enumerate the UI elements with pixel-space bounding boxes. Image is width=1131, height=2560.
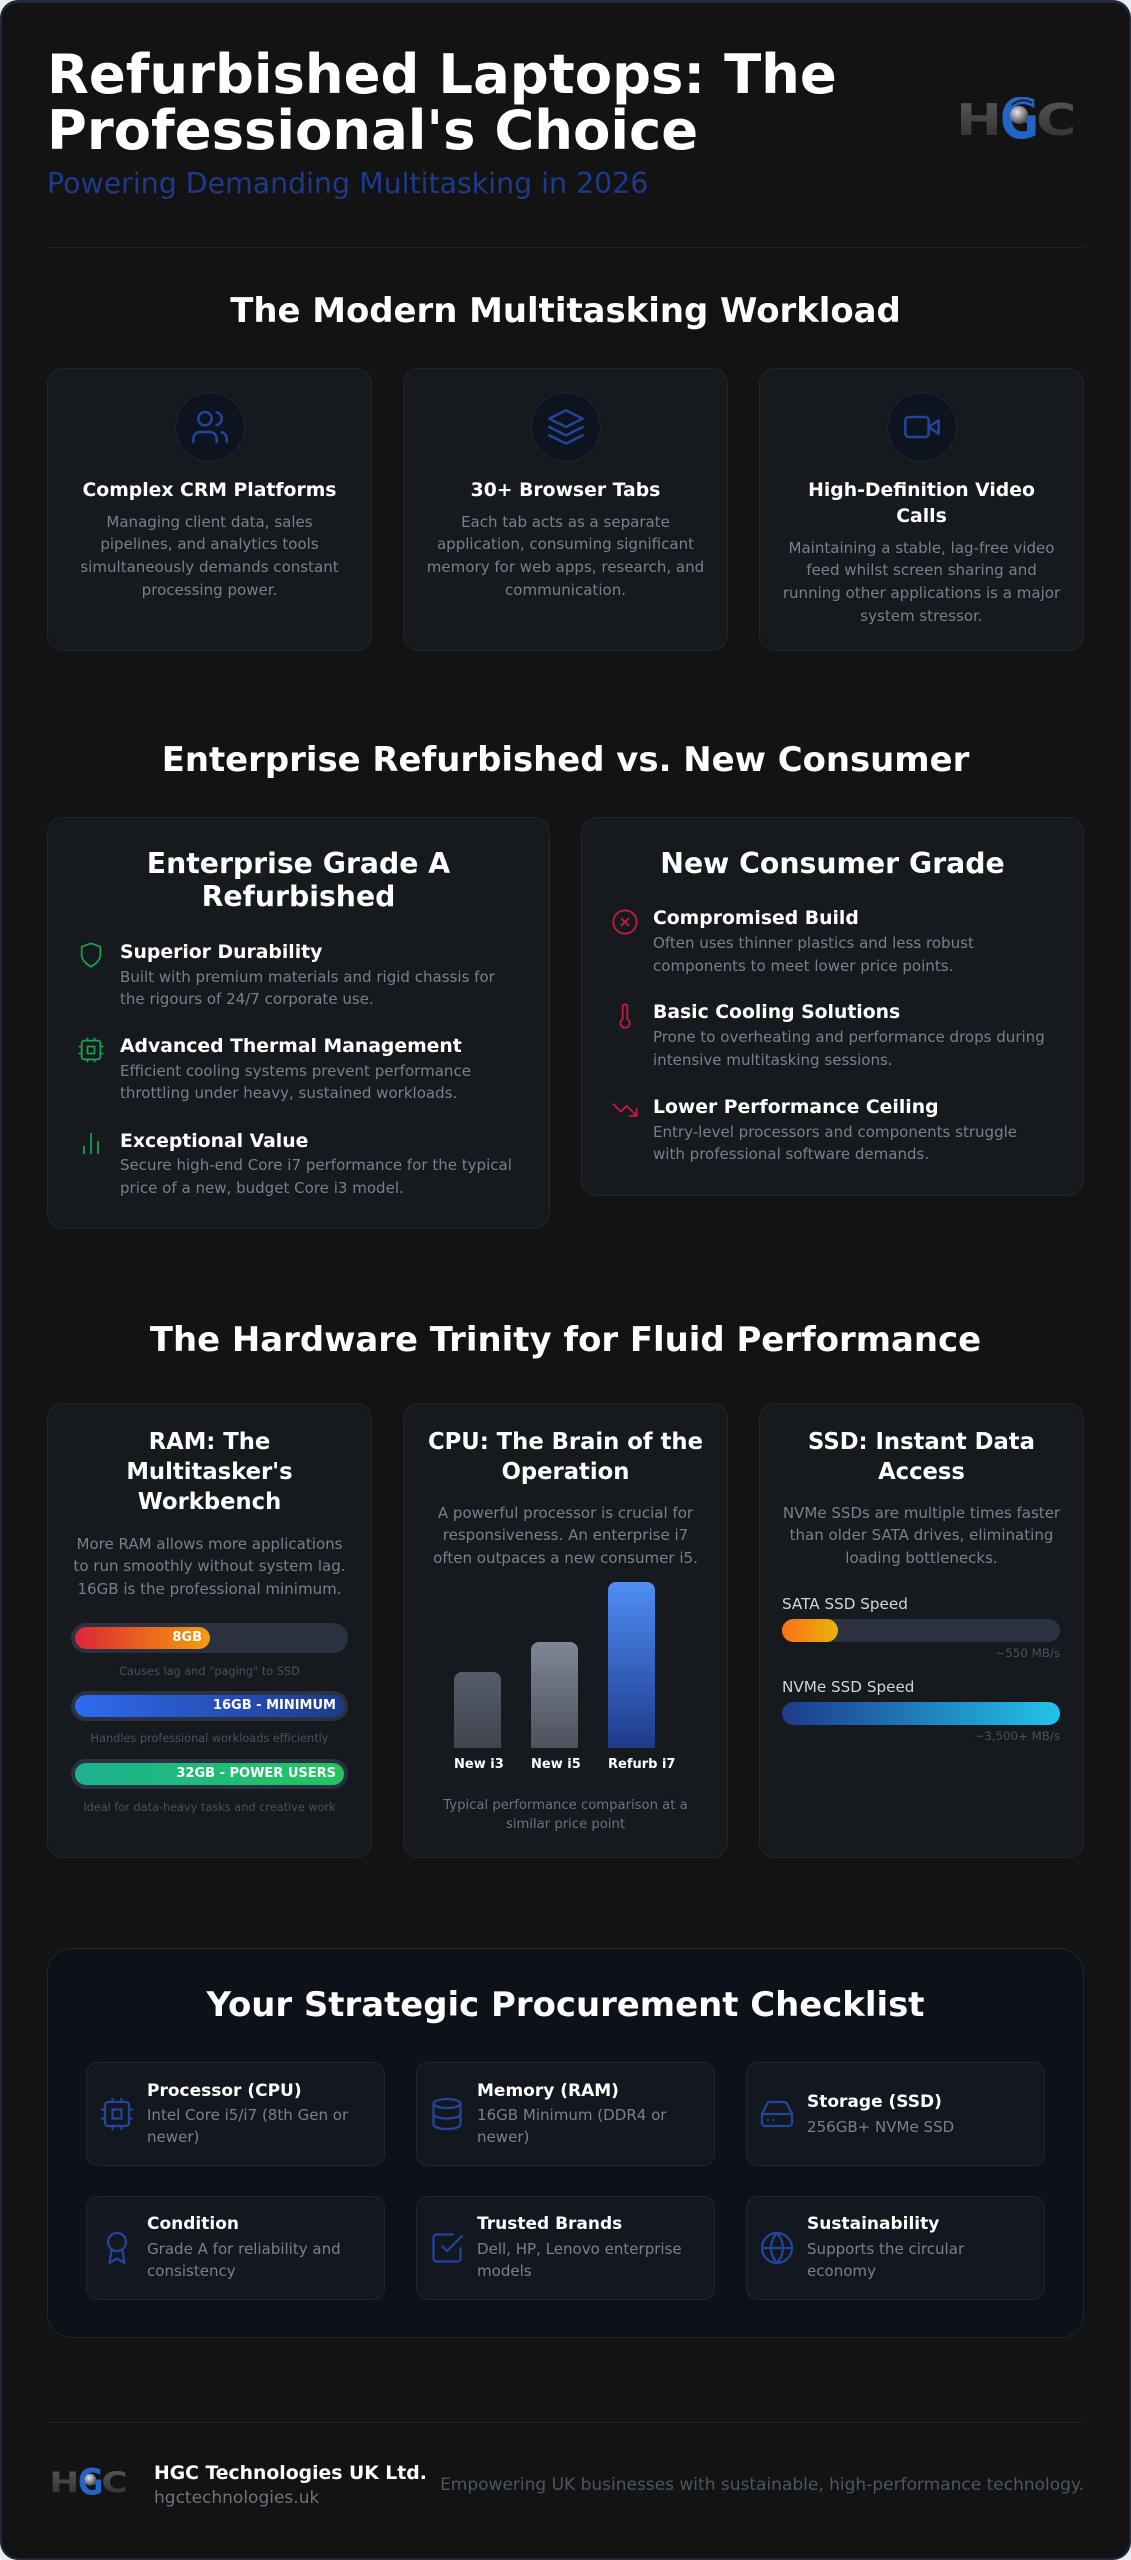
card text: Maintaining a stable, lag-free video (788, 538, 1054, 556)
panel: CRM platforms (47, 368, 372, 651)
item: condition (86, 2196, 385, 2300)
card text: feed whilst screen sharing and (806, 561, 1037, 579)
bar: New i3 (454, 1672, 501, 1748)
panel text: More RAM allows more applications (76, 1534, 343, 1552)
bar: 8GB (71, 1623, 348, 1653)
label: New i3 (454, 1756, 504, 1772)
item text: Grade A for reliability and (147, 2240, 341, 2258)
item title: Trusted Brands (477, 2214, 622, 2234)
item title: Superior Durability (120, 942, 322, 963)
item text: consistency (147, 2262, 236, 2280)
card title: High-Definition Video (808, 480, 1035, 501)
item text: Secure high-end Core i7 performance for the typical (120, 1156, 512, 1174)
item text: Prone to overheating and performance drops during (653, 1028, 1045, 1046)
footer tagline: Empowering UK businesses with sustainable, high-performance technology. (440, 2475, 1084, 2495)
item text: newer) (477, 2128, 529, 2146)
panel heading: Access (878, 1459, 965, 1485)
panel: SSD (759, 1403, 1084, 1858)
item text (477, 2240, 682, 2280)
card title (808, 480, 1035, 527)
bar: NVMe (782, 1702, 1060, 1725)
bar: 16GB: 16GB - MINIMUM (213, 1698, 336, 1713)
item text: intensive multitasking sessions. (653, 1051, 893, 1069)
panel heading: New Consumer Grade (660, 846, 1005, 880)
item text (147, 2106, 348, 2146)
item text (120, 1156, 512, 1197)
panel text: 16GB is the professional minimum. (77, 1580, 342, 1598)
caption: Causes lag and "paging" to SSD (119, 1665, 300, 1678)
title (47, 43, 837, 162)
icon: award (106, 2232, 128, 2264)
item title: Sustainability (807, 2214, 939, 2234)
bar chart (454, 1582, 675, 1772)
heading: workload: The Modern Multitasking Workload (230, 291, 901, 330)
panel: enterprise refurbished (47, 817, 550, 1229)
icon: cpu (100, 2098, 134, 2130)
caption: Ideal for data-heavy tasks and creative work (83, 1801, 336, 1814)
panel heading: Enterprise Grade A (147, 846, 450, 880)
caption: Typical performance comparison at a (443, 1798, 688, 1813)
icon: check square (432, 2233, 464, 2263)
item text: Built with premium materials and rigid chassis for (120, 968, 495, 986)
panel heading (147, 846, 450, 913)
item text: the rigours of 24/7 corporate use. (120, 990, 374, 1008)
item text (653, 1123, 1017, 1163)
value: ~3,500+ MB/s (974, 1729, 1060, 1743)
icon: cpu (78, 1038, 104, 1062)
bar: 16GB (71, 1691, 348, 1721)
item text (120, 968, 495, 1008)
item text: Supports the circular (807, 2240, 964, 2258)
item text: price of a new, budget Core i3 model. (120, 1179, 404, 1197)
logo: HGC footer (50, 2467, 128, 2497)
item text (653, 1028, 1045, 1069)
item title: Storage (SSD) (807, 2092, 942, 2112)
item text: Dell, HP, Lenovo enterprise (477, 2240, 682, 2258)
item title: Condition (147, 2214, 239, 2234)
item title: Lower Performance Ceiling (653, 1097, 939, 1118)
item text: 16GB Minimum (DDR4 or (477, 2106, 666, 2124)
card text: application, consuming significant (437, 535, 694, 553)
label: NVMe SSD Speed (782, 1678, 914, 1696)
item text (477, 2106, 666, 2146)
panel heading: Refurbished (202, 880, 395, 913)
item text: components to meet lower price points. (653, 957, 953, 975)
item: memory (416, 2062, 715, 2166)
caption (443, 1798, 688, 1832)
title: Refurbished Laptops: The (47, 43, 837, 106)
subtitle: Powering Demanding Multitasking in 2026 (47, 167, 648, 200)
icon: database (432, 2098, 462, 2130)
panel text: than older SATA drives, eliminating (790, 1526, 1053, 1544)
bar: Refurb i7 (608, 1582, 655, 1748)
panel text: responsiveness. An enterprise i7 (443, 1526, 688, 1544)
heading: comparison: Enterprise Refurbished vs. New Consumer (162, 740, 969, 779)
card text: Managing client data, sales (106, 512, 313, 530)
icon: trending down (612, 1103, 638, 1117)
card text (783, 538, 1060, 625)
item: storage (746, 2062, 1045, 2166)
item title: Memory (RAM) (477, 2081, 619, 2101)
panel: browser tabs (403, 368, 728, 651)
panel text (433, 1504, 698, 1567)
icon: video (887, 392, 957, 462)
item text: Often uses thinner plastics and less robust (653, 934, 974, 952)
card text: pipelines, and analytics tools (100, 535, 319, 553)
card title: Complex CRM Platforms (83, 480, 336, 501)
heading: hardware trinity: The Hardware Trinity for Fluid Performance (150, 1320, 981, 1359)
card text: Each tab acts as a separate (461, 512, 670, 530)
item: processor (86, 2062, 385, 2166)
label: SATA SSD Speed (782, 1595, 908, 1613)
logo: HGC header (957, 97, 1076, 140)
item title: Advanced Thermal Management (120, 1036, 462, 1057)
panel text (783, 1504, 1060, 1567)
item text: 256GB+ NVMe SSD (807, 2118, 954, 2136)
item title: Compromised Build (653, 908, 859, 929)
panel: video calls (759, 368, 1084, 651)
item title: Processor (CPU) (147, 2081, 302, 2101)
card text (80, 512, 339, 599)
item text: models (477, 2262, 532, 2280)
item: sustainability (746, 2196, 1045, 2300)
card text: memory for web apps, research, and (427, 558, 704, 576)
card title: Calls (896, 506, 947, 527)
panel text: to run smoothly without system lag. (73, 1557, 346, 1575)
panel text: A powerful processor is crucial for (438, 1504, 693, 1522)
panel heading: RAM: The (149, 1429, 270, 1455)
icon: thermometer (619, 1004, 631, 1028)
item text: throttling under heavy, sustained workloads. (120, 1084, 457, 1102)
bar: 32GB: 32GB - POWER USERS (176, 1766, 336, 1781)
footer company name: HGC Technologies UK Ltd. (154, 2462, 427, 2484)
panel: checklist (47, 1948, 1084, 2338)
panel text: loading bottlenecks. (845, 1549, 998, 1567)
panel heading: Workbench (138, 1489, 281, 1515)
item text (653, 934, 974, 975)
item text: Efficient cooling systems prevent performance (120, 1062, 471, 1080)
panel heading: CPU: The Brain of the (428, 1429, 703, 1455)
icon: x circle (612, 910, 638, 934)
card title: 30+ Browser Tabs (471, 480, 660, 501)
panel: RAM (47, 1403, 372, 1858)
bar: 32GB (71, 1759, 348, 1789)
card text: running other applications is a major (783, 584, 1060, 602)
icon: users (175, 392, 245, 462)
caption: Handles professional workloads efficiently (91, 1732, 328, 1745)
title: Professional's Choice (47, 99, 698, 162)
card text: processing power. (142, 581, 277, 599)
card text: communication. (505, 581, 626, 599)
panel heading (808, 1429, 1035, 1485)
panel text: NVMe SSDs are multiple times faster (783, 1504, 1060, 1522)
panel heading (428, 1429, 703, 1485)
value: ~550 MB/s (995, 1646, 1060, 1660)
card text (427, 512, 704, 599)
item text (147, 2240, 341, 2280)
item text: Entry-level processors and components struggle (653, 1123, 1017, 1141)
item: brands (416, 2196, 715, 2300)
item text: newer) (147, 2128, 199, 2146)
footer website: hgctechnologies.uk (154, 2488, 319, 2508)
icon: shield (80, 942, 102, 968)
icon: layers (531, 392, 601, 462)
card text: system stressor. (860, 607, 983, 625)
panel: CPU (403, 1403, 728, 1858)
label: Refurb i7 (608, 1756, 675, 1772)
caption: similar price point (506, 1817, 625, 1832)
bar: New i5 (531, 1642, 578, 1748)
panel: new consumer (581, 817, 1084, 1196)
icon: hard drive (760, 2100, 794, 2128)
item text: economy (807, 2262, 876, 2280)
panel heading: SSD: Instant Data (808, 1429, 1035, 1455)
label: New i5 (531, 1756, 581, 1772)
panel text (73, 1534, 346, 1598)
item title: Exceptional Value (120, 1131, 308, 1152)
panel heading: Multitasker's (126, 1459, 293, 1485)
item text (807, 2240, 964, 2280)
bar: SATA (782, 1619, 1060, 1642)
icon: globe (760, 2232, 794, 2264)
panel heading (126, 1429, 293, 1515)
icon: bar chart (83, 1132, 99, 1154)
panel heading: Operation (502, 1459, 629, 1485)
item text (120, 1062, 471, 1102)
item text: Intel Core i5/i7 (8th Gen or (147, 2106, 348, 2124)
checklist heading: Your Strategic Procurement Checklist (207, 1984, 924, 2024)
panel text: often outpaces a new consumer i5. (433, 1549, 698, 1567)
item text: with professional software demands. (653, 1145, 929, 1163)
card text: simultaneously demands constant (80, 558, 339, 576)
bar: 8GB: 8GB (172, 1630, 202, 1645)
item title: Basic Cooling Solutions (653, 1002, 900, 1023)
